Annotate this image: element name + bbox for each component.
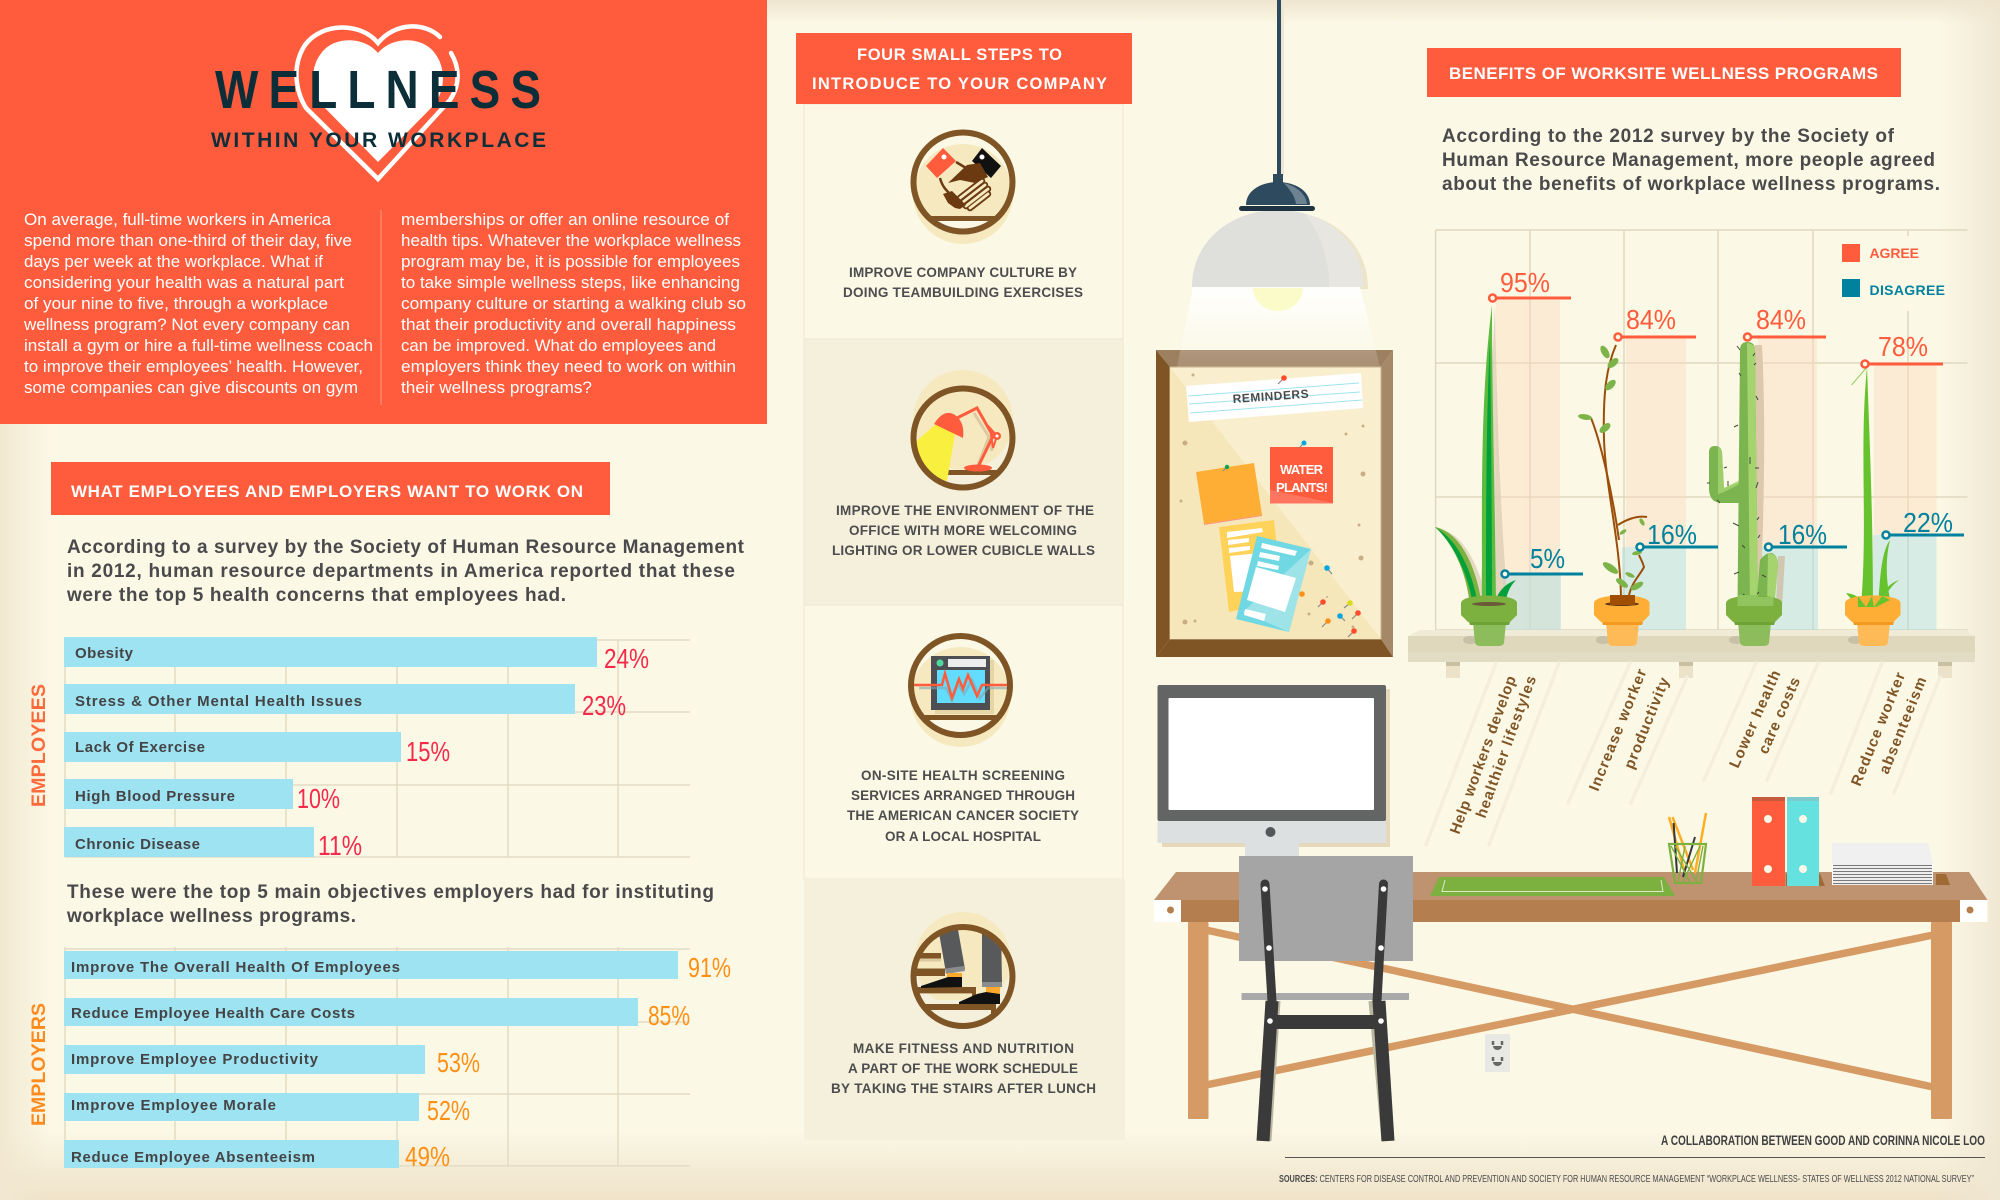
- intro text column 2: their wellness programs?: [401, 379, 592, 397]
- callout: 16 percent disagree: [1636, 519, 1718, 550]
- illustration: desk: [1154, 797, 1988, 1119]
- text: benefits intro: According to the 2012 survey by the Society of: [1442, 126, 1895, 147]
- bar: absenteeism: [64, 1140, 450, 1172]
- document: yellow paper: [1219, 520, 1283, 612]
- push pins: [1223, 375, 1361, 637]
- text: benefits intro: about the benefits of workplace wellness programs.: [1442, 174, 1940, 195]
- illustration: computer monitor: [1158, 685, 1390, 857]
- note: reminders: REMINDERS: [1232, 387, 1309, 406]
- category labels: Reduce worker: [1848, 670, 1909, 788]
- caption: step 2: LIGHTING OR LOWER CUBICLE WALLS: [832, 543, 1095, 558]
- text: employer objectives intro: These were the top 5 main objectives employers had for instituting: [67, 882, 714, 903]
- category labels: Help workers develop: [1447, 674, 1520, 836]
- callout: 84 percent agree: 84%: [1626, 304, 1676, 335]
- note: water plants: [1270, 447, 1333, 504]
- category labels: Increase worker: [1586, 666, 1650, 793]
- intro text column 2: company culture or starting a walking club so: [401, 295, 746, 313]
- green desk mat: [1430, 877, 1675, 896]
- category labels: [1426, 663, 1940, 845]
- category labels: healthier lifestyles: [1473, 674, 1540, 820]
- binders: [1752, 797, 1950, 886]
- title text: WELLNESS: [215, 60, 541, 120]
- disagree bars: [1503, 535, 1936, 637]
- intro text column 2: to take simple wellness steps, like enhancing: [401, 274, 740, 292]
- heading: what employees and employers want to work on: [51, 462, 610, 515]
- bar: productivity: Improve Employee Productivity: [71, 1051, 319, 1068]
- intro text column 1: considering your health was a natural part: [24, 274, 344, 292]
- intro text column 1: install a gym or hire a full-time wellness coach: [24, 337, 373, 355]
- category labels: Lower health: [1726, 668, 1784, 771]
- icon: heart: [296, 26, 458, 179]
- label: employees: EMPLOYEES: [28, 684, 50, 807]
- caption: step 3: ON-SITE HEALTH SCREENING: [861, 768, 1065, 783]
- intro text column 1: [23, 211, 373, 397]
- callout: 22 percent disagree: [1882, 507, 1964, 538]
- bar: stress: 23%: [582, 690, 626, 721]
- bar: morale: [64, 1093, 470, 1126]
- bar: productivity: [64, 1045, 480, 1078]
- caption: step 3: OR A LOCAL HOSPITAL: [885, 829, 1041, 844]
- callout: 84 percent agree: [1614, 304, 1696, 340]
- caption: step 4: A PART OF THE WORK SCHEDULE: [848, 1061, 1078, 1076]
- note: water plants: WATER: [1280, 462, 1324, 477]
- illustration: bulletin board: [1156, 350, 1393, 657]
- bar: absenteeism: 49%: [405, 1141, 450, 1172]
- plant: cactus: [1707, 342, 1785, 608]
- bar: obesity: [64, 637, 649, 674]
- icon: stairs: [910, 912, 1016, 1029]
- intro text column 2: program may be, it is possible for employees: [401, 253, 740, 271]
- bar: health care costs: [64, 998, 690, 1031]
- caption: step 4: [831, 1041, 1096, 1096]
- text: employer objectives intro: workplace wellness programs.: [66, 906, 356, 927]
- category labels: productivity: [1621, 675, 1673, 771]
- bar: stress: Stress & Other Mental Health Issues: [75, 693, 362, 710]
- caption: step 4: BY TAKING THE STAIRS AFTER LUNCH: [831, 1081, 1096, 1096]
- callout: 95 percent agree: [1489, 267, 1571, 302]
- bar: chronic disease: [64, 827, 362, 861]
- text: employee survey intro: According to a survey by the Society of Human Resource Management: [67, 537, 745, 558]
- bar: obesity: Obesity: [75, 645, 134, 662]
- intro text column 2: that their productivity and overall happiness: [401, 316, 736, 334]
- bar: productivity: 53%: [437, 1047, 480, 1078]
- bar: lack of exercise: [64, 732, 450, 767]
- icon: desk lamp: [910, 370, 1016, 490]
- pot: orange 2: [1594, 595, 1650, 646]
- caption: step 1: [843, 265, 1083, 300]
- pot: orange 4: [1845, 596, 1900, 646]
- panel: title header: [0, 0, 767, 424]
- callout: 78 percent agree: 78%: [1878, 331, 1928, 362]
- icon: handshake: [910, 130, 1016, 244]
- bar: morale: 52%: [427, 1095, 470, 1126]
- heading: what employees and employers want to work on: WHAT EMPLOYEES AND EMPLOYERS WANT TO WORK ON: [71, 482, 583, 501]
- caption: step 3: SERVICES ARRANGED THROUGH: [851, 788, 1075, 803]
- text: employee survey intro: were the top 5 health concerns that employees had.: [66, 585, 566, 606]
- bar: chronic disease: Chronic Disease: [75, 836, 200, 853]
- chart grid: [1436, 230, 1968, 630]
- intro text column 1: some companies can give discounts on gym: [24, 379, 358, 397]
- plant: tall grass: [1435, 305, 1516, 605]
- illustration: chair: [1239, 856, 1413, 1141]
- desk legs: [1188, 922, 1952, 1119]
- intro text column 1: of your nine to five, through a workplace: [24, 295, 328, 313]
- intro text column 1: wellness program? Not every company can: [23, 316, 350, 334]
- text: benefits intro: Human Resource Management, more people agreed: [1442, 150, 1935, 171]
- panel: four small steps: [796, 33, 1132, 1140]
- text: benefits intro: [1442, 126, 1940, 195]
- callout: 95 percent agree: 95%: [1500, 267, 1550, 298]
- intro text column 2: employers think they need to work on within: [401, 358, 736, 376]
- intro text column 2: health tips. Whatever the workplace wellness: [401, 232, 741, 250]
- desk end caps: [1154, 900, 1988, 922]
- icon: health monitor: [908, 633, 1013, 747]
- caption: step 2: IMPROVE THE ENVIRONMENT OF THE: [836, 503, 1094, 518]
- note: orange sticky: [1196, 463, 1262, 525]
- pot: green 1: [1461, 596, 1517, 646]
- legend: [1842, 244, 1945, 298]
- desk cross braces: [1206, 930, 1933, 1087]
- shelf: [1408, 630, 1975, 678]
- step panel backgrounds: [804, 104, 1125, 1140]
- illustration: ceiling lamp: [1177, 0, 1380, 367]
- intro text column 1: spend more than one-third of their day, five: [24, 232, 352, 250]
- bar: high blood pressure: [64, 779, 340, 814]
- callout: 5 percent disagree: [1502, 543, 1583, 578]
- intro text column 1: On average, full-time workers in America: [24, 211, 332, 229]
- fingers: [960, 181, 988, 208]
- pots: [1461, 595, 1900, 646]
- caption: step 2: [832, 503, 1095, 558]
- callout: 5 percent disagree: 5%: [1530, 543, 1565, 574]
- bar: absenteeism: Reduce Employee Absenteeism: [71, 1149, 315, 1166]
- bar: overall health: Improve The Overall Health Of Employees: [71, 959, 400, 976]
- intro text column 2: can be improved. What do employees and: [401, 337, 716, 355]
- bar: overall health: 91%: [688, 952, 731, 983]
- caption: step 1: IMPROVE COMPANY CULTURE BY: [849, 265, 1077, 280]
- intro text column 2: memberships or offer an online resource of: [401, 211, 729, 229]
- bar: health care costs: Reduce Employee Health Care Costs: [71, 1005, 355, 1022]
- plant: branching tree: [1578, 344, 1647, 597]
- outlet: [1485, 1034, 1510, 1072]
- bar: obesity: 24%: [604, 643, 649, 674]
- callout: 16 percent disagree second: [1765, 519, 1847, 550]
- heading: four small steps: INTRODUCE TO YOUR COMPANY: [812, 75, 1107, 93]
- plant: lime grass: [1846, 367, 1899, 607]
- heading: benefits of worksite wellness programs: BENEFITS OF WORKSITE WELLNESS PROGRAMS: [1449, 64, 1878, 83]
- category labels: care costs: [1755, 675, 1804, 757]
- subtitle text: WITHIN YOUR WORKPLACE: [211, 129, 546, 152]
- caption: step 3: [847, 768, 1079, 844]
- callout: 22 percent disagree: 22%: [1903, 507, 1953, 538]
- intro text column 1: to improve their employees’ health. However,: [24, 358, 363, 376]
- note: reminders: [1186, 373, 1363, 422]
- legend: AGREE: [1870, 245, 1919, 261]
- caption: step 1: DOING TEAMBUILDING EXERCISES: [843, 285, 1083, 300]
- bar: high blood pressure: 10%: [297, 783, 340, 814]
- chart: benefits plants: [1408, 230, 1975, 845]
- intro text column 1: days per week at the workplace. What if: [24, 253, 323, 271]
- callout: 16 percent disagree second: 16%: [1778, 519, 1827, 550]
- bar: health care costs: 85%: [648, 1000, 690, 1031]
- heading: four small steps: [796, 33, 1132, 104]
- note: water plants: PLANTS!: [1276, 480, 1328, 495]
- heading: benefits of worksite wellness programs: [1427, 48, 1901, 97]
- label: employers: EMPLOYERS: [28, 1003, 50, 1126]
- bar: high blood pressure: High Blood Pressure: [75, 788, 235, 805]
- callout: 16 percent disagree: 16%: [1647, 519, 1697, 550]
- legend: DISAGREE: [1870, 282, 1945, 298]
- bar chart: employees: [28, 637, 690, 861]
- category labels: absenteeism: [1876, 675, 1930, 776]
- pencil cup: [1669, 813, 1706, 883]
- intro text column 2: [401, 211, 746, 397]
- heading: four small steps: FOUR SMALL STEPS TO: [857, 46, 1062, 64]
- text: employee survey intro: in 2012, human resource departments in America reported that these: [67, 561, 735, 582]
- callout: 84 percent agree second: [1744, 304, 1826, 340]
- bar: lack of exercise: Lack Of Exercise: [75, 739, 205, 756]
- bar: lack of exercise: 15%: [406, 736, 450, 767]
- board dots: [1180, 374, 1366, 628]
- caption: step 3: THE AMERICAN CANCER SOCIETY: [847, 808, 1079, 823]
- text: employee survey intro: [66, 537, 745, 606]
- document: blue paper: [1236, 536, 1311, 632]
- paper stack: [1832, 843, 1933, 885]
- callout: 78 percent agree: [1862, 331, 1943, 368]
- bar: morale: Improve Employee Morale: [71, 1097, 276, 1114]
- text: employer objectives intro: [66, 882, 714, 927]
- bar: overall health: [64, 951, 731, 983]
- agree bars: [1496, 300, 1936, 633]
- pot: green 3: [1726, 595, 1782, 646]
- bar: stress: [64, 684, 626, 721]
- caption: step 2: OFFICE WITH MORE WELCOMING: [849, 523, 1077, 538]
- bar chart: employers: [28, 947, 731, 1172]
- bar: chronic disease: 11%: [318, 830, 362, 861]
- callout: 84 percent agree second: 84%: [1756, 304, 1806, 335]
- caption: step 4: MAKE FITNESS AND NUTRITION: [853, 1041, 1074, 1056]
